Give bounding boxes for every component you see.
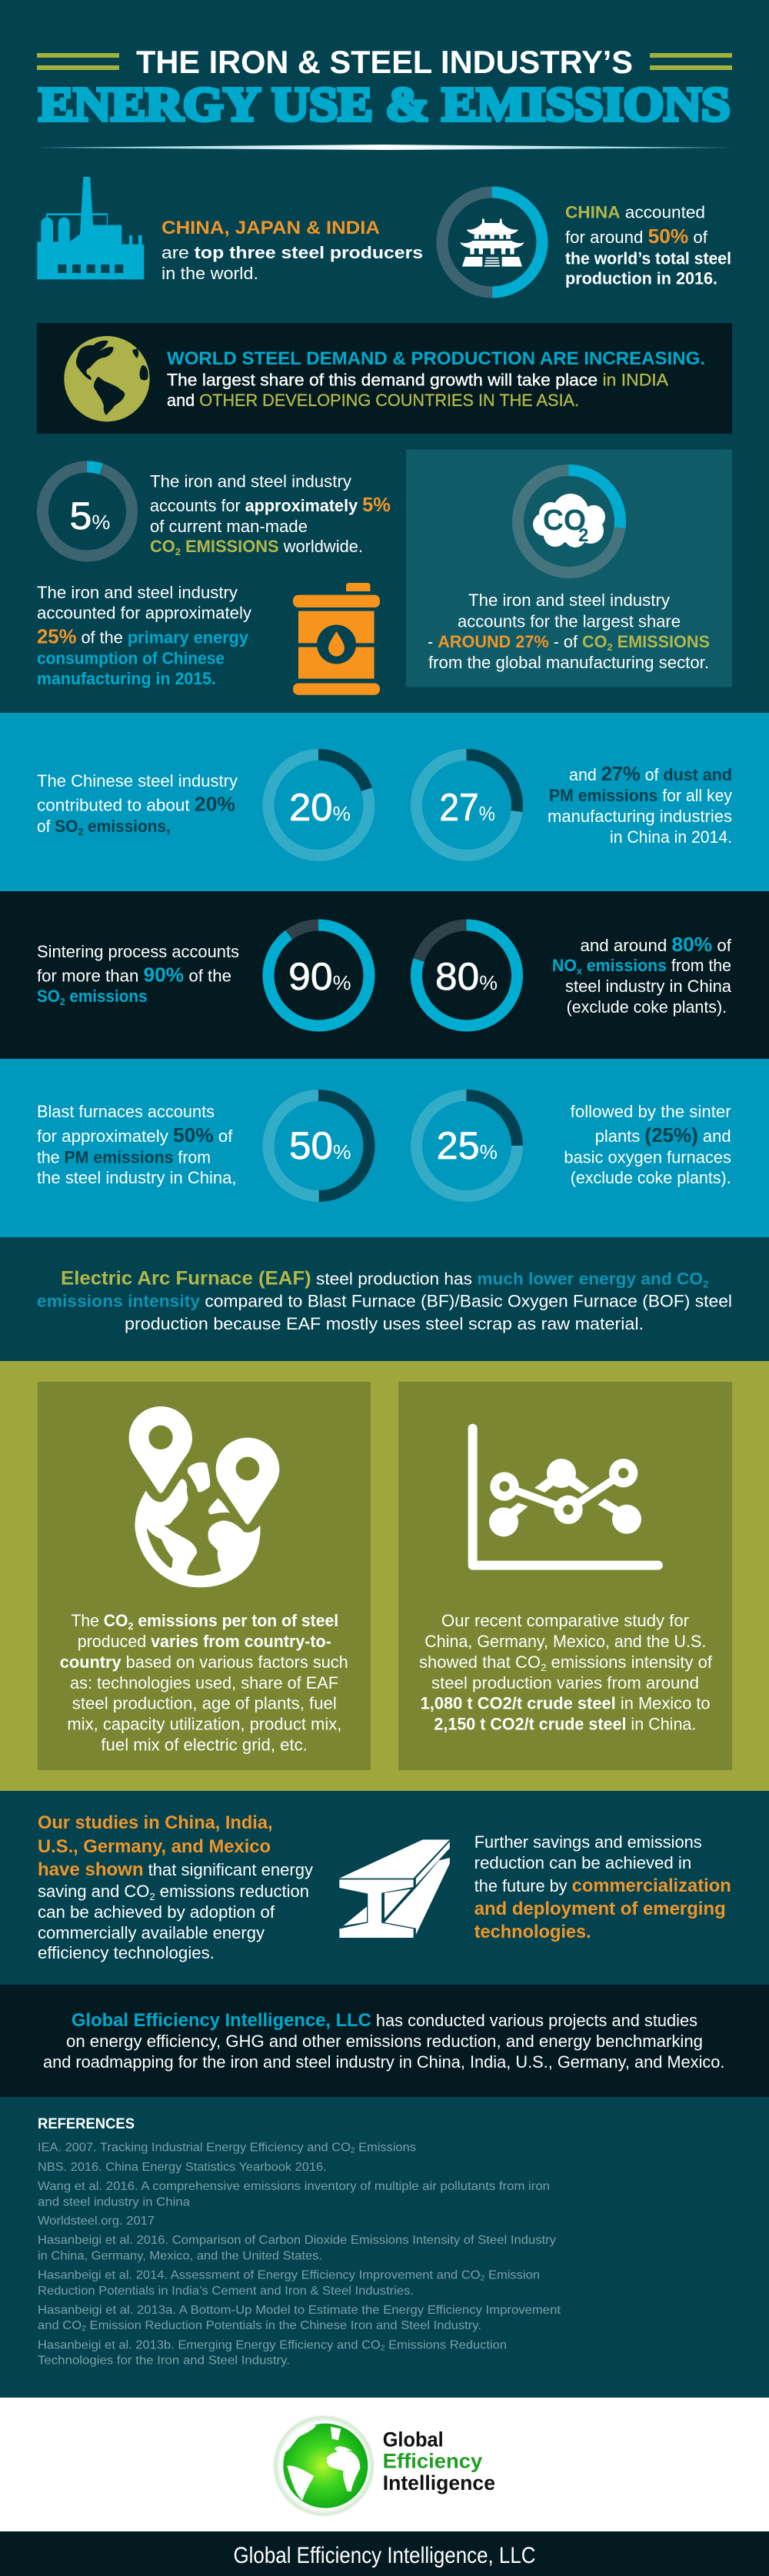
text: 5% of CO2: The iron and steel industry: [150, 472, 351, 491]
text: sintering 90%: Sintering process accounts: [37, 942, 239, 961]
text: 20% of SO2: emissions,: [83, 817, 171, 836]
text: 5% of CO2: CO: [150, 537, 279, 557]
text: sinter plants 25%: plants (25%) and: [595, 1123, 731, 1147]
text: NOx 80%: steel industry in China: [565, 977, 732, 996]
text: our studies: have shown that significant energy: [38, 1859, 313, 1880]
panel: 27% of CO2 from manufacturing: from the global manufacturing sector.: [428, 653, 709, 672]
text: CO2 per ton of steel: [60, 1611, 348, 1755]
text: sintering 90%: 2: [60, 996, 65, 1007]
icon: CO2 cloud: CO: [543, 504, 586, 537]
text: 5% of CO2: 2: [175, 546, 181, 557]
text: our studies: commercially available energy: [38, 1923, 265, 1942]
text: further savings: and deployment of emerging: [474, 1899, 726, 1919]
text: 20% of SO2: of SO: [37, 817, 79, 836]
references: REFERENCES: [38, 2116, 135, 2132]
references: Emissions: [355, 2142, 416, 2155]
text: sintering 90%: SO: [37, 987, 62, 1006]
text: comparative study: emissions intensity of: [546, 1652, 713, 1672]
text: our studies: can be achieved by adoption of: [38, 1902, 275, 1922]
panel: 27% of CO2 from manufacturing: - AROUND 27% - of CO: [428, 632, 608, 651]
text: 25% primary energy: manufacturing in 2015.: [37, 669, 216, 688]
text: 27% of dust and PM: PM emissions for all key: [549, 786, 732, 805]
text: top three producers: [161, 218, 423, 283]
references: [38, 2116, 561, 2368]
text: sinter plants 25%: followed by the sinter: [571, 1102, 731, 1121]
text: further savings: reduction can be achieved in: [474, 1853, 691, 1872]
title: THE IRON & STEEL INDUSTRY’S: [136, 44, 633, 80]
icon: globe with map pins: [129, 1406, 279, 1587]
text: further savings: technologies.: [474, 1922, 591, 1942]
donut: 90%: [268, 925, 369, 1026]
text: China 50%: [565, 203, 731, 288]
text: top three producers: CHINA, JAPAN & INDIA: [161, 218, 380, 238]
donut: 80%: [417, 925, 517, 1026]
panel: 27% of CO2 from manufacturing: [406, 449, 732, 687]
text: comparative study: 2,150 t CO2/t crude steel in China.: [434, 1715, 696, 1733]
text: NOx 80%: from the: [671, 956, 734, 975]
text: blast furnaces 50%: Blast furnaces accounts: [37, 1102, 215, 1121]
text: top three producers: are top three steel producers: [161, 243, 423, 262]
references: 2: [381, 2344, 385, 2352]
text: 20% of SO2: [37, 771, 238, 837]
donut: 25%: [417, 1095, 517, 1196]
text: our studies: U.S., Germany, and Mexico: [38, 1836, 271, 1857]
text: NOx 80%: x: [577, 965, 583, 977]
text: sintering 90%: emissions: [65, 987, 148, 1006]
text: China 50%: production in 2016.: [565, 269, 717, 288]
icon: CO2 cloud: [533, 494, 605, 547]
text: 5% of CO2: accounts for approximately 5%: [150, 493, 391, 516]
references: Technologies for the Iron and Steel Industry.: [38, 2355, 290, 2368]
text: 20% of SO2: contributed to about 20%: [37, 792, 235, 815]
text: comparative study: [419, 1611, 713, 1733]
text: comparative study: 1,080 t CO2/t crude steel in Mexico to: [421, 1693, 711, 1713]
text: our studies: 2: [149, 1891, 155, 1902]
text: further savings: the future by commercialization: [474, 1875, 731, 1896]
icon: green globe: [272, 2415, 375, 2517]
references: and steel industry in China: [38, 2195, 190, 2208]
donut: 20%: [268, 755, 369, 855]
logo: Global Efficiency Intelligence: Global: [383, 2428, 444, 2451]
text: 5% of CO2: worldwide.: [284, 537, 364, 556]
text: global efficiency intelligence statement: and roadmapping for the iron and steel industry in China, India, U.S., Germany, and Mexico.: [43, 2052, 724, 2072]
donut: 27%: 27%: [439, 786, 495, 829]
panel: world steel demand: and OTHER DEVELOPING COUNTRIES IN THE ASIA.: [167, 391, 579, 410]
logo: Global Efficiency Intelligence: [272, 2415, 495, 2517]
text: CO2 per ton of steel: emissions per ton of steel: [133, 1611, 338, 1630]
text: global efficiency intelligence statement: Global Efficiency Intelligence, LLC has conducted various projects and studies: [72, 2010, 697, 2031]
text: CO2 per ton of steel: country based on various factors such: [60, 1652, 348, 1672]
text: China 50%: the world’s total steel: [565, 249, 731, 268]
band: SO2 20% and dust 27%: [37, 755, 732, 855]
text: 5% of CO2: EMISSIONS: [181, 537, 279, 556]
donut: 50%: [268, 1095, 369, 1196]
text: CO2 per ton of steel: steel production, age of plants, fuel: [72, 1693, 337, 1713]
references: and CO: [38, 2319, 80, 2332]
references: Emission Reduction Potentials in the Chinese Iron and Steel Industry.: [86, 2319, 481, 2332]
donut: 50%: 50%: [289, 1124, 351, 1167]
text: 20% of SO2: The Chinese steel industry: [37, 771, 238, 790]
references: Emissions Reduction: [385, 2338, 507, 2351]
text: 25% primary energy: accounted for approximately: [37, 603, 251, 623]
title: [37, 44, 732, 150]
text: comparative study: showed that CO: [419, 1652, 541, 1672]
text: 25% primary energy: consumption of Chinese: [37, 649, 225, 668]
references: NBS. 2016. China Energy Statistics Yearbook 2016.: [38, 2161, 327, 2174]
text: blast furnaces 50%: for approximately 50% of: [37, 1123, 233, 1147]
donut: 27%: [417, 755, 517, 855]
text: our studies: [38, 1812, 313, 1962]
icon: line chart: [473, 1429, 658, 1566]
text: 25% primary energy: [37, 583, 251, 688]
icon: earth: [64, 336, 150, 421]
text: CO2 per ton of steel: as: technologies used, share of EAF: [70, 1673, 338, 1692]
text: comparative study: China, Germany, Mexico, and the U.S.: [424, 1632, 706, 1651]
text: comparative study: steel production varies from around: [431, 1673, 699, 1692]
footer: Global Efficiency Intelligence, LLC: [234, 2543, 535, 2568]
text: electric arc furnace: 2: [703, 1279, 708, 1290]
text: our studies: Our studies in China, India,: [38, 1812, 272, 1833]
text: sinter plants 25%: basic oxygen furnaces: [564, 1147, 731, 1167]
text: 25% primary energy: The iron and steel industry: [37, 583, 238, 602]
text: CO2 per ton of steel: 2: [128, 1620, 133, 1632]
panel: world steel demand: WORLD STEEL DEMAND & PRODUCTION ARE INCREASING.: [167, 348, 705, 369]
panel: 27% of CO2 from manufacturing: The iron and steel industry: [468, 591, 670, 610]
text: comparative study: Our recent comparative study for: [441, 1611, 689, 1630]
donut: 80%: 80%: [435, 955, 498, 998]
text: NOx 80%: and around 80% of: [580, 933, 732, 956]
icon: factory: [37, 177, 144, 279]
panel: 27% of CO2 from manufacturing: EMISSIONS: [613, 632, 710, 651]
text: top three producers: in the world.: [161, 264, 258, 283]
text: electric arc furnace: Electric Arc Furnace (EAF) steel production has much lower energy and CO: [61, 1268, 696, 1290]
text: blast furnaces 50%: the steel industry in China,: [37, 1168, 237, 1187]
donut: 5%: [43, 467, 132, 556]
text: NOx 80%: [552, 933, 732, 1017]
logo: Global Efficiency Intelligence: Intelligence: [383, 2471, 495, 2494]
panel: 27% of CO2 from manufacturing: 2: [608, 641, 613, 653]
icon: CO2 cloud: 2: [578, 525, 588, 546]
donut: 25%: 25%: [437, 1124, 498, 1167]
logo: Global Efficiency Intelligence: Efficiency: [383, 2450, 482, 2473]
donut: 20%: 20%: [289, 786, 351, 829]
text: electric arc furnace: production because EAF mostly uses steel scrap as raw material.: [125, 1314, 644, 1333]
text: 25% primary energy: 25% of the primary energy: [37, 624, 249, 647]
text: our studies: efficiency technologies.: [38, 1943, 215, 1962]
panel: comparative study: [398, 1382, 732, 1770]
text: 20% of SO2: 2: [78, 826, 83, 837]
text: electric arc furnace: emissions intensity compared to Blast Furnace (BF)/Basic Oxygen Furnace (BOF) steel: [37, 1292, 732, 1310]
text: CO2 per ton of steel: mix, capacity utilization, product mix,: [67, 1715, 341, 1733]
text: CO2 per ton of steel: produced varies from country-to-: [78, 1632, 331, 1651]
panel: emissions vary by country: [38, 1382, 371, 1770]
band: sintering 90% and NOx 80%: [37, 925, 732, 1026]
text: 5% of CO2: of current man-made: [150, 517, 308, 536]
text: CO2 per ton of steel: The CO: [71, 1611, 129, 1630]
text: further savings: Further savings and emissions: [474, 1832, 702, 1852]
panel: world steel demand: The largest share of this demand growth will take place in INDIA: [167, 371, 668, 390]
band: blast furnaces 50% and sinter plants 25%: [37, 1095, 731, 1196]
text: 27% of dust and PM: in China in 2014.: [610, 827, 732, 847]
text: 27% of dust and PM: and 27% of dust and: [569, 762, 732, 785]
panel: world steel demand: [37, 323, 732, 434]
text: sintering 90%: [37, 942, 239, 1007]
text: global efficiency intelligence statement: on energy efficiency, GHG and other emissions reduction, and energy benchmarking: [66, 2032, 703, 2051]
panel: 27% of CO2 from manufacturing: accounts for the largest share: [458, 611, 681, 631]
references: Hasanbeigi et al. 2013b. Emerging Energy Efficiency and CO: [38, 2338, 371, 2351]
text: 5% of CO2: [150, 472, 391, 557]
donut: 90%: 90%: [288, 955, 351, 998]
text: China 50%: CHINA accounted: [565, 203, 705, 221]
text: global efficiency intelligence statement: [43, 2010, 724, 2072]
references: 2: [82, 2325, 86, 2333]
text: NOx 80%: (exclude coke plants).: [567, 997, 727, 1017]
references: Wang et al. 2016. A comprehensive emissions inventory of multiple air pollutants from iron: [38, 2180, 550, 2193]
text: electric arc furnace: [37, 1268, 732, 1333]
text: 27% of dust and PM: manufacturing industries: [548, 807, 732, 826]
icon: oil barrel: [293, 583, 380, 695]
text: NOx 80%: emissions: [582, 956, 667, 975]
text: comparative study: 2: [541, 1662, 546, 1673]
references: Hasanbeigi et al. 2014. Assessment of Energy Efficiency Improvement and CO: [38, 2269, 466, 2282]
text: further savings: [474, 1832, 731, 1942]
text: blast furnaces 50%: [37, 1102, 237, 1187]
donut: 5%: 5%: [69, 494, 111, 537]
donut: 27%: [518, 471, 620, 572]
text: 27% of dust and PM: [548, 762, 732, 847]
references: Hasanbeigi et al. 2016. Comparison of Carbon Dioxide Emissions Intensity of Steel Industry: [38, 2234, 556, 2247]
references: 2: [481, 2275, 485, 2283]
text: sinter plants 25%: [564, 1102, 731, 1187]
references: Hasanbeigi et al. 2013a. A Bottom-Up Model to Estimate the Energy Efficiency Improvement: [38, 2304, 561, 2317]
text: blast furnaces 50%: the PM emissions from: [37, 1147, 211, 1167]
references: Reduction Potentials in India’s Cement and Iron & Steel Industries.: [38, 2285, 414, 2298]
text: sinter plants 25%: (exclude coke plants).: [571, 1168, 731, 1187]
references: in China, Germany, Mexico, and the United States.: [38, 2249, 322, 2262]
text: China 50%: for around 50% of: [565, 225, 708, 248]
text: NOx 80%: NO: [552, 956, 667, 977]
text: sintering 90%: for more than 90% of the: [37, 963, 231, 986]
references: IEA. 2007. Tracking Industrial Energy Efficiency and CO: [38, 2142, 342, 2155]
text: CO2 per ton of steel: fuel mix of electric grid, etc.: [101, 1735, 308, 1755]
title: ENERGY USE & EMISSIONS: [38, 78, 731, 131]
icon: steel I-beam: [339, 1839, 450, 1938]
text: our studies: emissions reduction: [155, 1882, 309, 1901]
text: our studies: saving and CO: [38, 1882, 150, 1901]
donut: China 50% with pagoda: [442, 192, 542, 292]
references: Emission: [484, 2269, 540, 2282]
references: 2: [351, 2147, 355, 2155]
references: Worldsteel.org. 2017: [38, 2215, 155, 2228]
